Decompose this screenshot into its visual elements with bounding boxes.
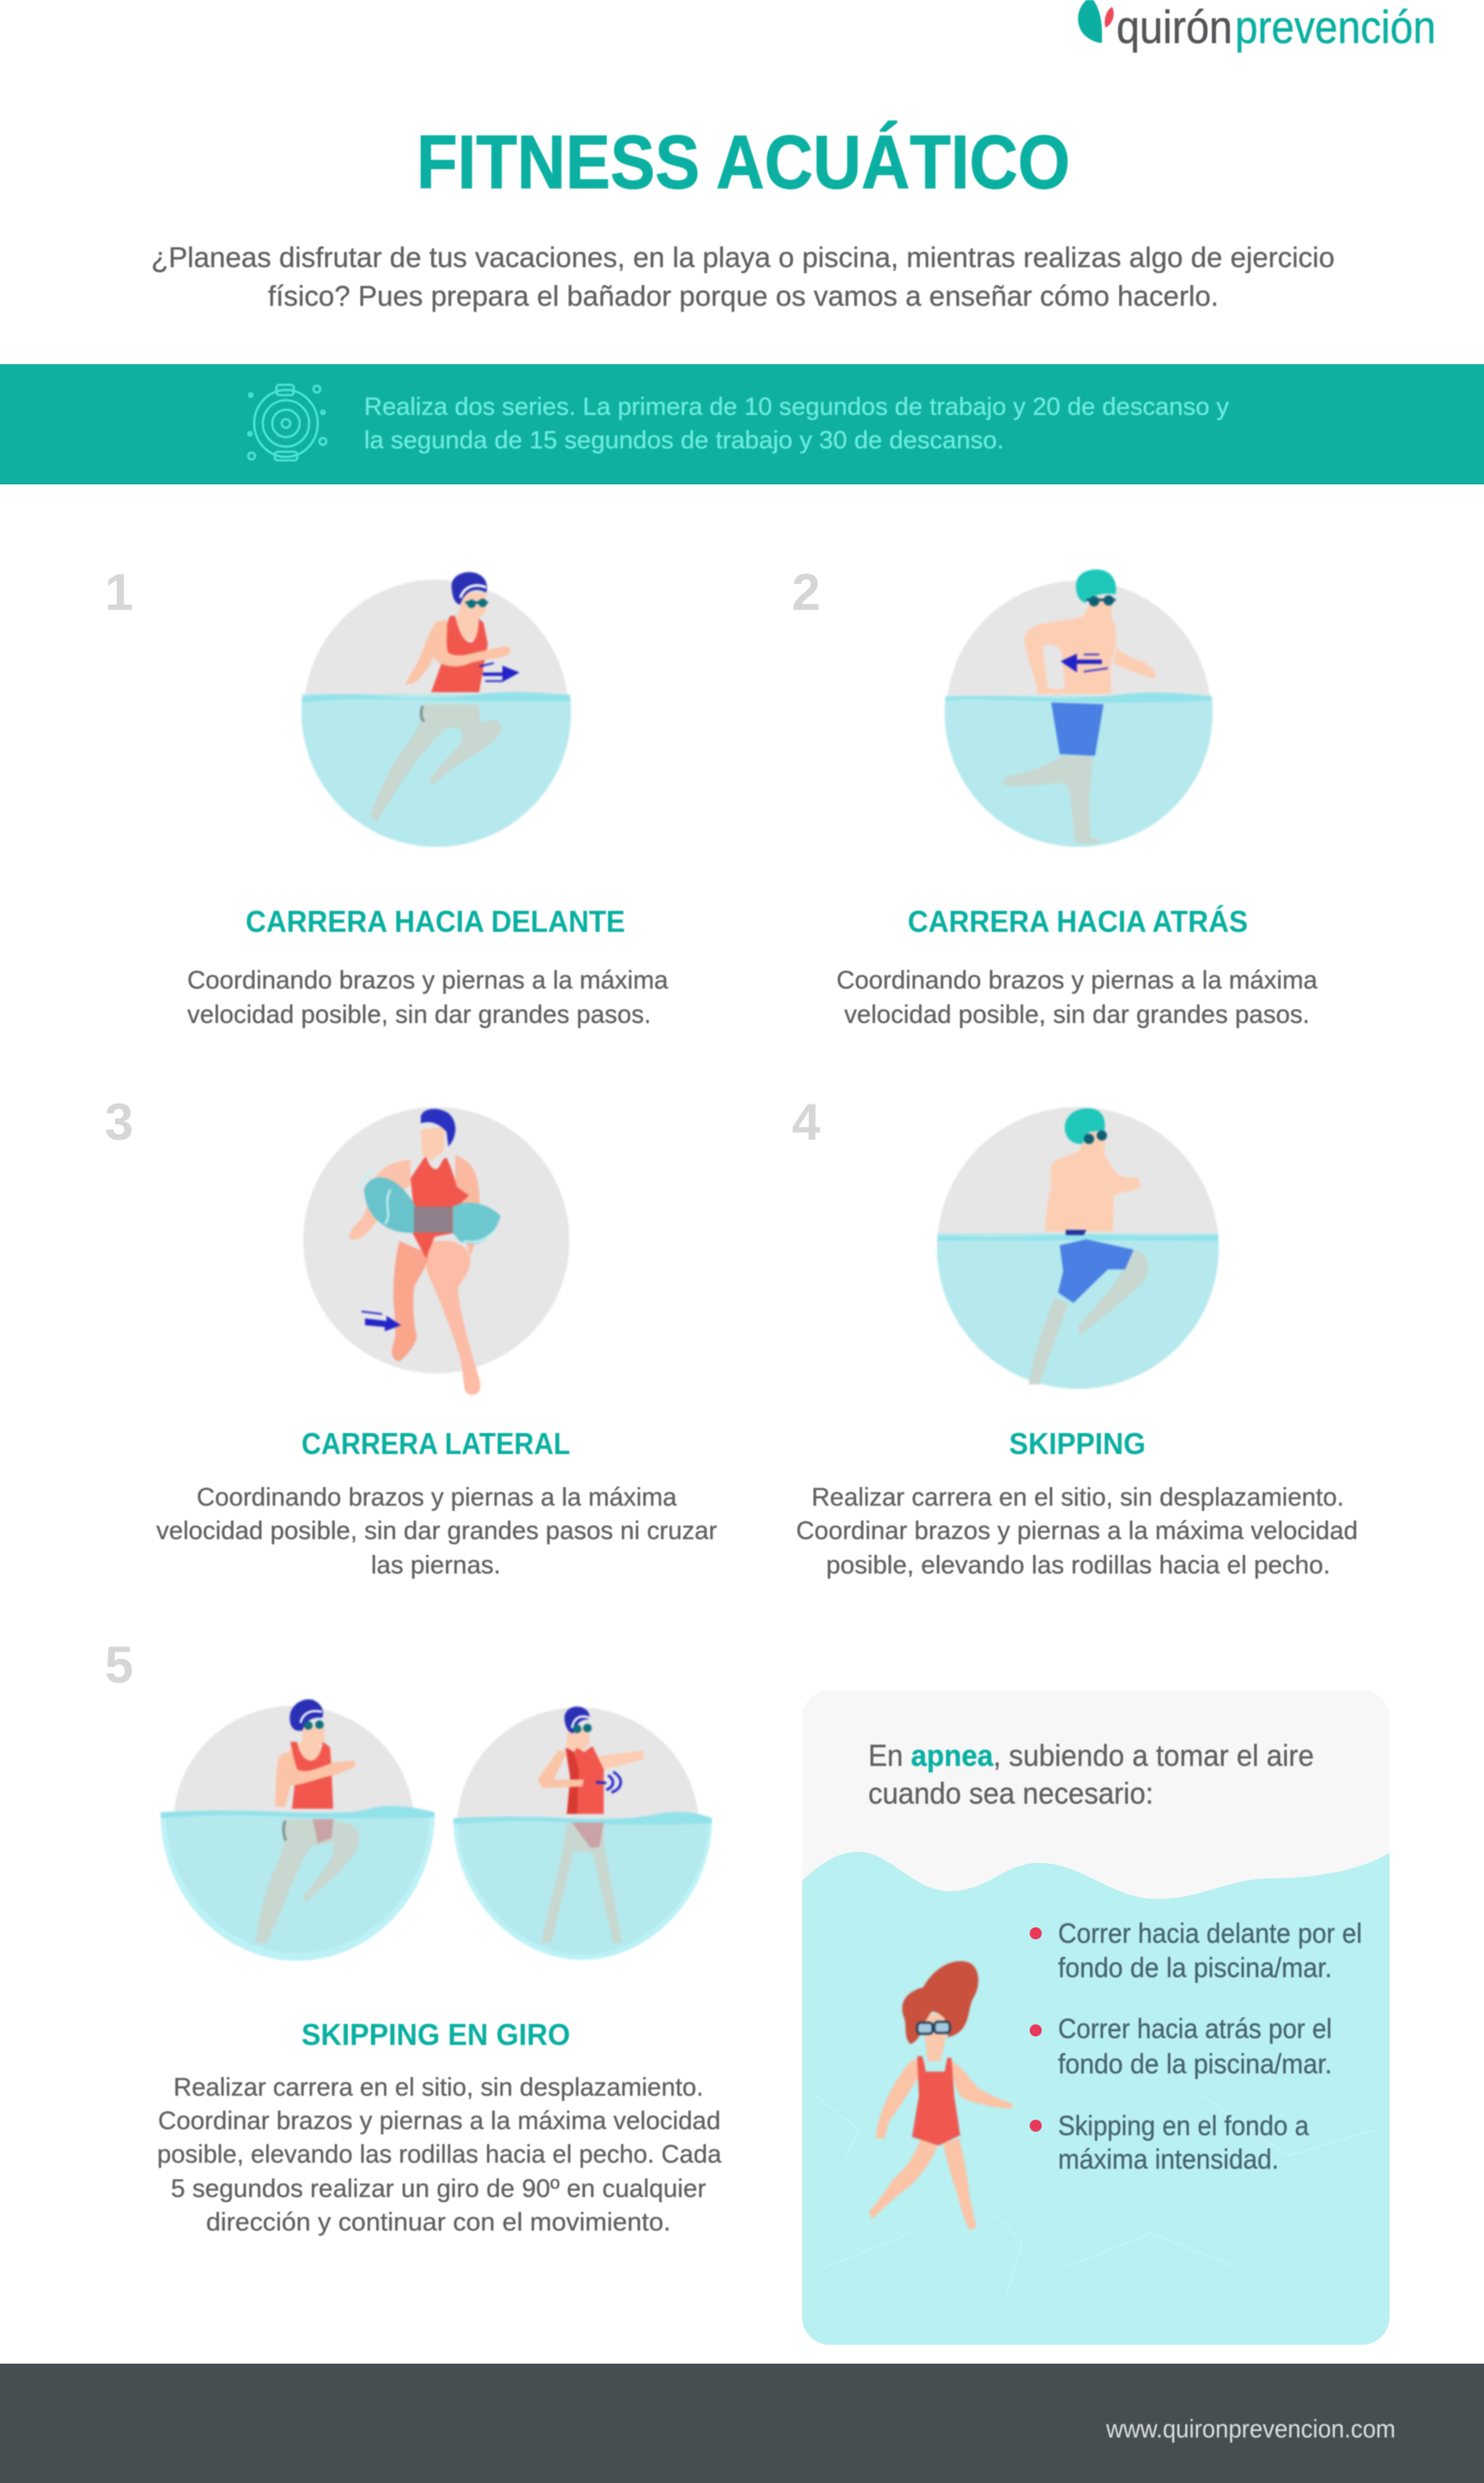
icon: stopwatch <box>248 385 326 460</box>
logo: quirónprevención: quirón <box>1116 2 1232 53</box>
card heading: cuando sea necesario: <box>868 1777 1153 1811</box>
illustration: carrera hacia atrás <box>944 569 1213 850</box>
bullet list: fondo de la piscina/mar. <box>1058 1952 1332 1983</box>
description <box>156 1483 717 1579</box>
number 4: 4 <box>792 1093 821 1151</box>
title: FITNESS ACUÁTICO <box>417 119 1070 204</box>
illustration: carrera hacia delante <box>301 572 571 850</box>
description: velocidad posible, sin dar grandes pasos ni cruzar <box>156 1517 717 1545</box>
swimmer illustration <box>869 1961 1013 2230</box>
series text: la segunda de 15 segundos de trabajo y 30 de descanso. <box>364 427 1004 454</box>
panel: exercise 2 <box>792 563 1317 1029</box>
card heading: En apnea, subiendo a tomar el aire <box>868 1739 1314 1773</box>
description: Coordinando brazos y piernas a la máxima <box>187 966 668 995</box>
bullet list <box>1030 1918 1362 2175</box>
water wave <box>802 1852 1390 2345</box>
panel: apnea card <box>802 1690 1390 2345</box>
number 2: 2 <box>792 563 820 621</box>
panel: exercise 4 <box>792 1093 1358 1579</box>
panel: exercise 5 <box>105 1636 721 2237</box>
description: 5 segundos realizar un giro de 90º en cualquier <box>171 2175 706 2203</box>
water ripples <box>816 2096 1374 2302</box>
description: dirección y continuar con el movimiento. <box>206 2208 671 2237</box>
description: Coordinando brazos y piernas a la máxima <box>197 1483 677 1512</box>
description: velocidad posible, sin dar grandes pasos. <box>844 1001 1310 1029</box>
description: Coordinando brazos y piernas a la máxima <box>836 966 1317 995</box>
panel: exercise 3 <box>105 1093 717 1579</box>
intro text: ¿Planeas disfrutar de tus vacaciones, en la playa o piscina, mientras realizas algo de ejercicio <box>151 241 1335 273</box>
number 1: 1 <box>105 563 133 621</box>
arrow <box>1061 654 1108 672</box>
bullet list: fondo de la piscina/mar. <box>1058 2048 1332 2079</box>
panel: series band <box>0 364 1484 484</box>
description <box>157 2073 721 2237</box>
heading: SKIPPING <box>1009 1427 1146 1461</box>
footer <box>0 2364 1484 2483</box>
description: posible, elevando las rodillas hacia el pecho. Cada <box>157 2140 721 2169</box>
illustration: carrera lateral <box>303 1107 569 1395</box>
description: Realizar carrera en el sitio, sin desplazamiento. <box>173 2073 703 2102</box>
bullet list: Correr hacia atrás por el <box>1058 2013 1332 2044</box>
bullet list: máxima intensidad. <box>1058 2144 1279 2175</box>
footer url: www.quironprevencion.com <box>1105 2415 1396 2443</box>
logo: quirónprevención <box>1078 0 1436 53</box>
description <box>836 966 1317 1029</box>
arrow <box>362 1311 401 1331</box>
description: Realizar carrera en el sitio, sin desplazamiento. <box>812 1483 1344 1512</box>
description <box>796 1483 1358 1579</box>
panel: exercise 1 <box>105 563 668 1029</box>
series text <box>364 393 1230 454</box>
number 3: 3 <box>105 1093 133 1151</box>
description: Coordinar brazos y piernas a la máxima velocidad <box>796 1517 1358 1545</box>
logo: quirónprevención: prevención <box>1235 2 1436 53</box>
number 5: 5 <box>105 1636 133 1694</box>
heading: SKIPPING EN GIRO <box>301 2018 570 2052</box>
description: las piernas. <box>371 1551 501 1579</box>
description <box>187 966 668 1029</box>
illustration: skipping en giro, figure B <box>453 1707 712 1960</box>
bullet list: Skipping en el fondo a <box>1058 2110 1309 2141</box>
description: Coordinar brazos y piernas a la máxima velocidad <box>158 2107 721 2135</box>
heading: CARRERA HACIA DELANTE <box>246 905 625 939</box>
intro text: físico? Pues prepara el bañador porque os vamos a enseñar cómo hacerlo. <box>268 280 1219 312</box>
heading: CARRERA HACIA ATRÁS <box>908 904 1248 939</box>
card heading <box>868 1739 1314 1811</box>
illustration: skipping <box>936 1107 1219 1391</box>
description: posible, elevando las rodillas hacia el pecho. <box>826 1551 1330 1579</box>
arrow <box>479 663 520 682</box>
description: velocidad posible, sin dar grandes pasos. <box>187 1001 651 1029</box>
intro text <box>151 241 1335 312</box>
illustration: skipping en giro, figure A <box>161 1700 435 1961</box>
heading: CARRERA LATERAL <box>301 1427 570 1461</box>
arrow: turn <box>596 1772 621 1792</box>
bullet list: Correr hacia delante por el <box>1058 1918 1362 1949</box>
series text: Realiza dos series. La primera de 10 segundos de trabajo y 20 de descanso y <box>364 393 1230 421</box>
